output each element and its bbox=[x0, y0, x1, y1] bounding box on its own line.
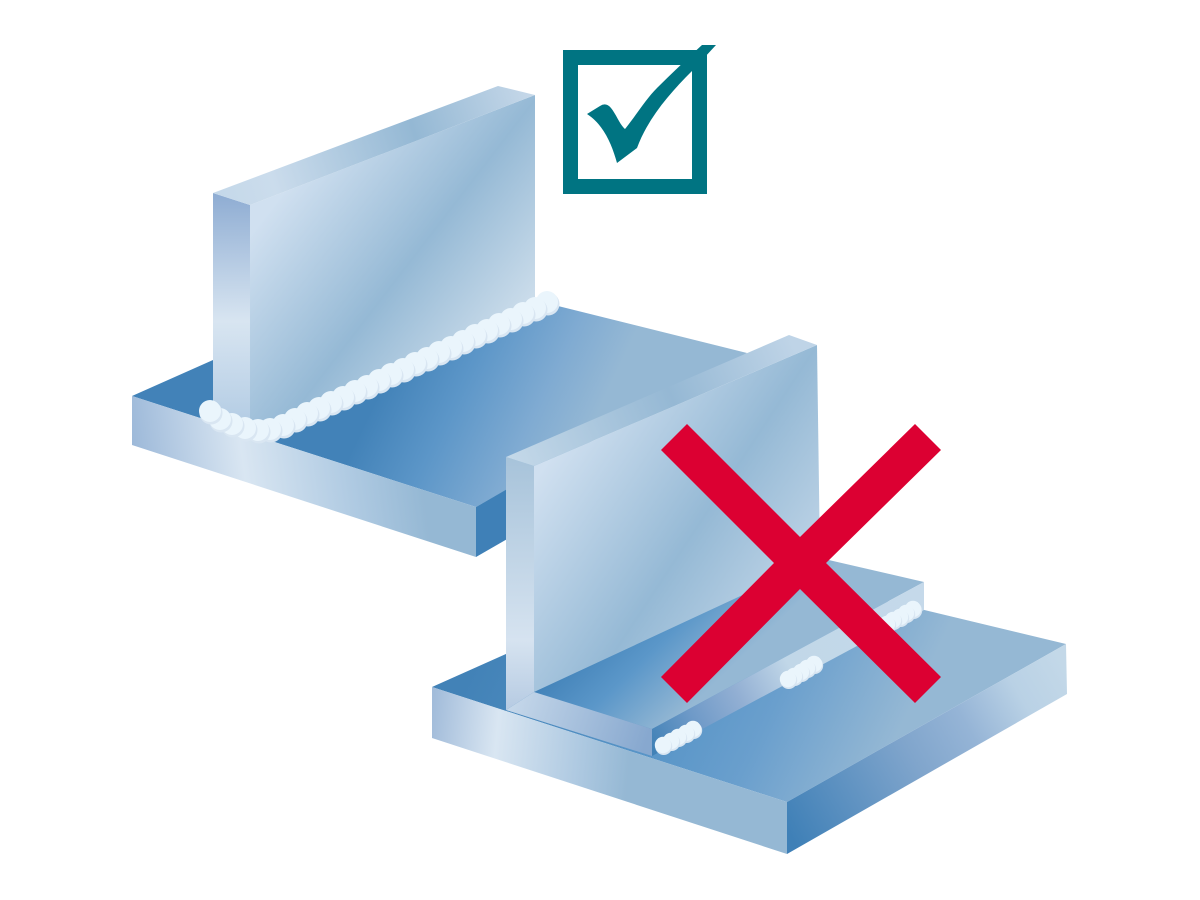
icon: red cross bbox=[661, 424, 941, 703]
left assembly: continuous weld T-joint bbox=[132, 86, 747, 557]
right base plate bbox=[432, 560, 1067, 854]
right upright plate and flange bbox=[506, 335, 924, 756]
left upright plate bbox=[213, 86, 535, 432]
short weld segment: front bbox=[655, 721, 702, 755]
right assembly: intermittent weld with angle plate bbox=[432, 335, 1067, 854]
short weld segment: middle bbox=[780, 656, 823, 689]
icon: check mark in box bbox=[563, 45, 716, 194]
short weld segment: back bbox=[879, 601, 922, 634]
continuous weld seam bbox=[199, 291, 560, 444]
left base plate bbox=[132, 306, 747, 557]
